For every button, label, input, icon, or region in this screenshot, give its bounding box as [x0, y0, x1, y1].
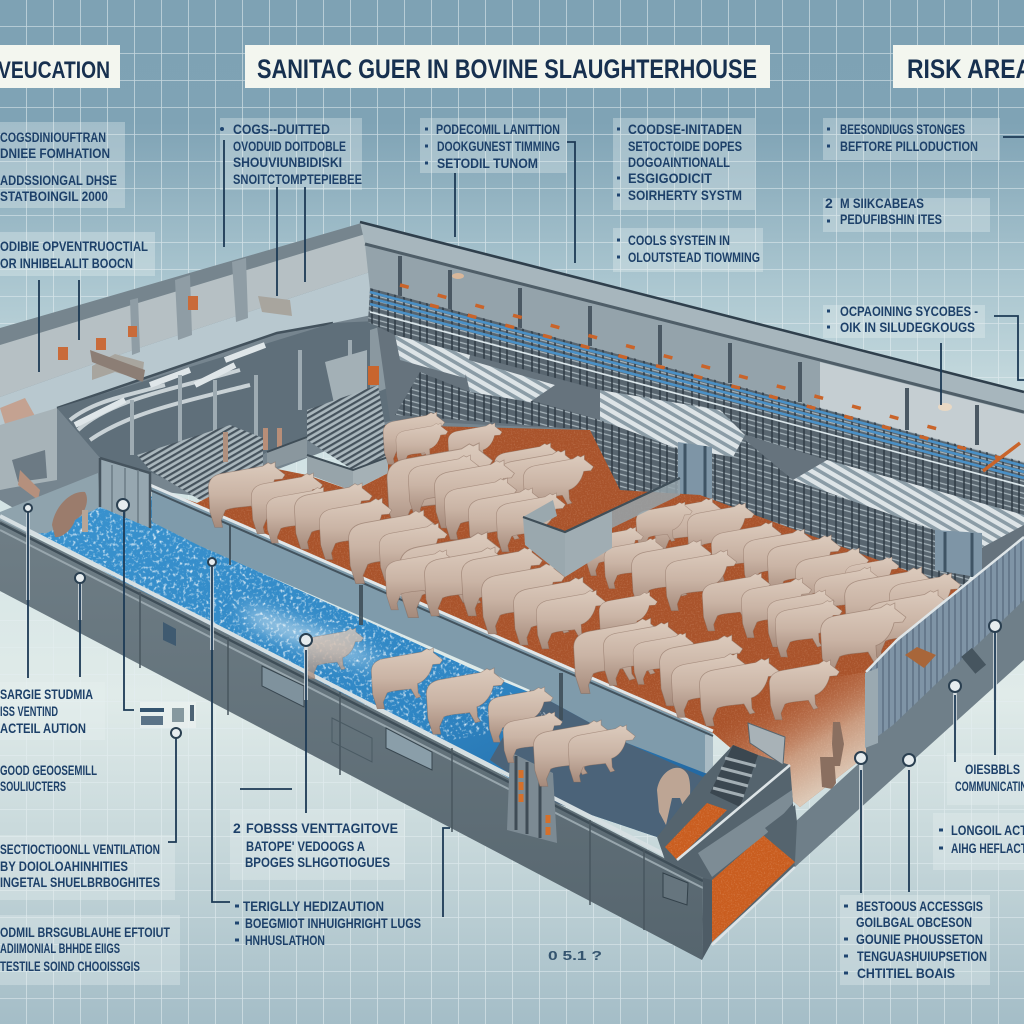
- label: cooling system block: [613, 228, 763, 272]
- label: cooling system block: OLOUTSTEAD TIOWMING: [628, 249, 760, 265]
- label: sectional ventilation block: BY DOIOLOAHINHITIES: [0, 858, 128, 874]
- label: cross-limited block: [220, 118, 362, 190]
- heading: main title: [245, 45, 770, 88]
- back wall, roof and windows: [360, 222, 1024, 575]
- label: sectional ventilation block: [0, 835, 175, 900]
- centre partition fence: [523, 478, 680, 577]
- label: cross-limited block: SNOITCTOMPTEPIEBEE: [233, 171, 362, 187]
- label: cross-initiated block: ESGIGODICIT: [628, 170, 712, 186]
- gate frame and side wall: [0, 458, 150, 537]
- heading: left title: VEUCATION: [0, 57, 110, 84]
- pointer lines: lower: [28, 505, 995, 917]
- label: food ventilation block: [420, 118, 567, 173]
- pen floor: [182, 425, 958, 807]
- heading: right title: [893, 45, 1024, 88]
- bottom centre mark: 0 5.1 ?: [548, 948, 602, 963]
- label: restricted access block: TENGUASHUIUPSETION: [857, 948, 987, 964]
- label: lower left good practices: GOOD GEOOSEMILL: [0, 762, 97, 778]
- label: forced ventilation block: FOBSSS VENTTAGITOVE: [246, 820, 398, 836]
- outer front wall: [0, 516, 703, 960]
- label: effluent block: TESTILE SOIND CHOOISSGIS: [0, 958, 140, 974]
- label: food ventilation block: PODECOMIL LANITTION: [436, 121, 560, 137]
- label: cross-initiated block: SETOCTOIDE DOPES: [628, 138, 742, 154]
- label: risk sub-areas block: [823, 195, 990, 232]
- pointer lines: upper: [39, 137, 1024, 405]
- label: forced ventilation block: [230, 810, 405, 880]
- label: before production block: BEESONDIUGS STONGES: [840, 121, 965, 137]
- label: effluent block: ODMIL BRSGUBLAUHE EFTOIUT: [0, 924, 170, 940]
- corrugated roofs: [395, 335, 1024, 547]
- heading: main title: SANITAC GUER IN BOVINE SLAUGHTERHOUSE: [257, 54, 757, 84]
- label: restricted access block: CHTITIEL BOAIS: [857, 965, 955, 981]
- label: restricted access block: BESTOOUS ACCESSGIS: [856, 898, 983, 914]
- label: risk sub-areas block: 2: [825, 195, 833, 211]
- label: operating systems block: [823, 303, 985, 338]
- label: cross-initiated block: DOGOAINTIONALL: [628, 154, 730, 170]
- label: restricted access block: GOUNIE PHOUSSETON: [856, 931, 983, 947]
- label: lower left action block: SARGIE STUDMIA: [0, 686, 93, 702]
- label: lower left action block: ACTEIL AUTION: [0, 720, 86, 736]
- label: cross-limited block: OVODUID DOITDOBLE: [233, 138, 346, 154]
- label: thermal insulation block: [235, 898, 421, 948]
- label: lower left good practices: SOULIUCTERS: [0, 778, 66, 794]
- people on floor: [820, 722, 844, 789]
- left machinery bay: [0, 222, 600, 512]
- label: cross-limited block: SHOUVIUNBIDISKI: [233, 154, 342, 170]
- pen wall: [150, 485, 713, 775]
- label: top left block: COGSDINIOUFTRAN: [0, 129, 106, 145]
- label: cross-initiated block: [613, 118, 755, 210]
- steel door blocks: [678, 442, 982, 578]
- label: lower left good practices: [0, 762, 97, 794]
- label: before production block: [823, 118, 1000, 160]
- label: cross-initiated block: COODSE-INITADEN: [628, 121, 742, 137]
- label: effluent block: ADIIMONIAL BHHDE EIIGS: [0, 940, 120, 956]
- label: thermal insulation block: HNHUSLATHON: [245, 932, 325, 948]
- label: forced ventilation block: BPOGES SLHGOTIOGUES: [245, 854, 390, 870]
- label: lower left action block: ISS VENTIND: [0, 703, 58, 719]
- label: top left block: STATBOINGIL 2000: [0, 188, 108, 204]
- label: restricted access block: GOILBGAL OBCESON: [856, 914, 972, 930]
- label: communication block: [947, 753, 1024, 805]
- valve machine on front wall: [507, 752, 557, 843]
- label: cross-limited block: COGS--DUITTED: [233, 121, 330, 137]
- label: top left block: [0, 122, 125, 208]
- label: ventilation block: OR INHIBELALIT BOOCN: [0, 255, 133, 271]
- label: ventilation block: [0, 232, 155, 276]
- label: sectional ventilation block: SECTIOCTIOONLL VENTILATION: [0, 841, 160, 857]
- label: cross-initiated block: SOIRHERTY SYSTM: [628, 187, 742, 203]
- label: risk sub-areas block: M SIIKCABEAS: [840, 195, 924, 211]
- water channel: [20, 495, 720, 837]
- label: operating systems block: OIK IN SILUDEGKOUGS: [840, 319, 975, 335]
- pointer markers: [24, 499, 1001, 766]
- cattle, back rows: [208, 412, 961, 726]
- label: top left block: ADDSSIONGAL DHSE: [0, 172, 117, 188]
- pen partitions: [267, 437, 388, 491]
- right outer wall: [795, 537, 1024, 867]
- small legend icon: [140, 702, 196, 728]
- conveyor lines: [368, 285, 1024, 600]
- label: before production block: BEFTORE PILLODUCTION: [840, 138, 978, 154]
- label: forced ventilation block: 2: [233, 820, 241, 836]
- label: restricted access block: [840, 895, 990, 985]
- cattle in water channel: [304, 628, 690, 825]
- label: forced ventilation block: BATOPE' VEDOOGS A: [246, 838, 365, 854]
- loading ramp and chutes: [657, 723, 800, 960]
- label: ventilation block: ODIBIE OPVENTRUOCTIAL: [0, 238, 148, 254]
- heading: left title: [0, 45, 120, 88]
- label: food ventilation block: SETODIL TUNOM: [437, 155, 538, 171]
- label: thermal insulation block: BOEGMIOT INHUIGHRIGHT LUGS: [245, 915, 421, 931]
- label: lower left action block: [0, 682, 105, 740]
- label: operating systems block: OCPAOINING SYCOBES -: [840, 303, 978, 319]
- label: top left block: DNIEE FOMHATION: [0, 145, 110, 161]
- label: effluent block: [0, 915, 180, 985]
- label: food ventilation block: DOOKGUNEST TIMMING: [437, 138, 560, 154]
- label: thermal insulation block: TERIGLLY HEDIZAUTION: [243, 898, 384, 914]
- label: risk sub-areas block: PEDUFIBSHIN ITES: [840, 211, 942, 227]
- label: cooling system block: COOLS SYSTEIN IN: [628, 232, 730, 248]
- label: local access block: [933, 813, 1024, 870]
- label: sectional ventilation block: INGETAL SHUELBRBOGHITES: [0, 874, 160, 890]
- illustration: slaughterhouse cutaway: [0, 222, 1024, 960]
